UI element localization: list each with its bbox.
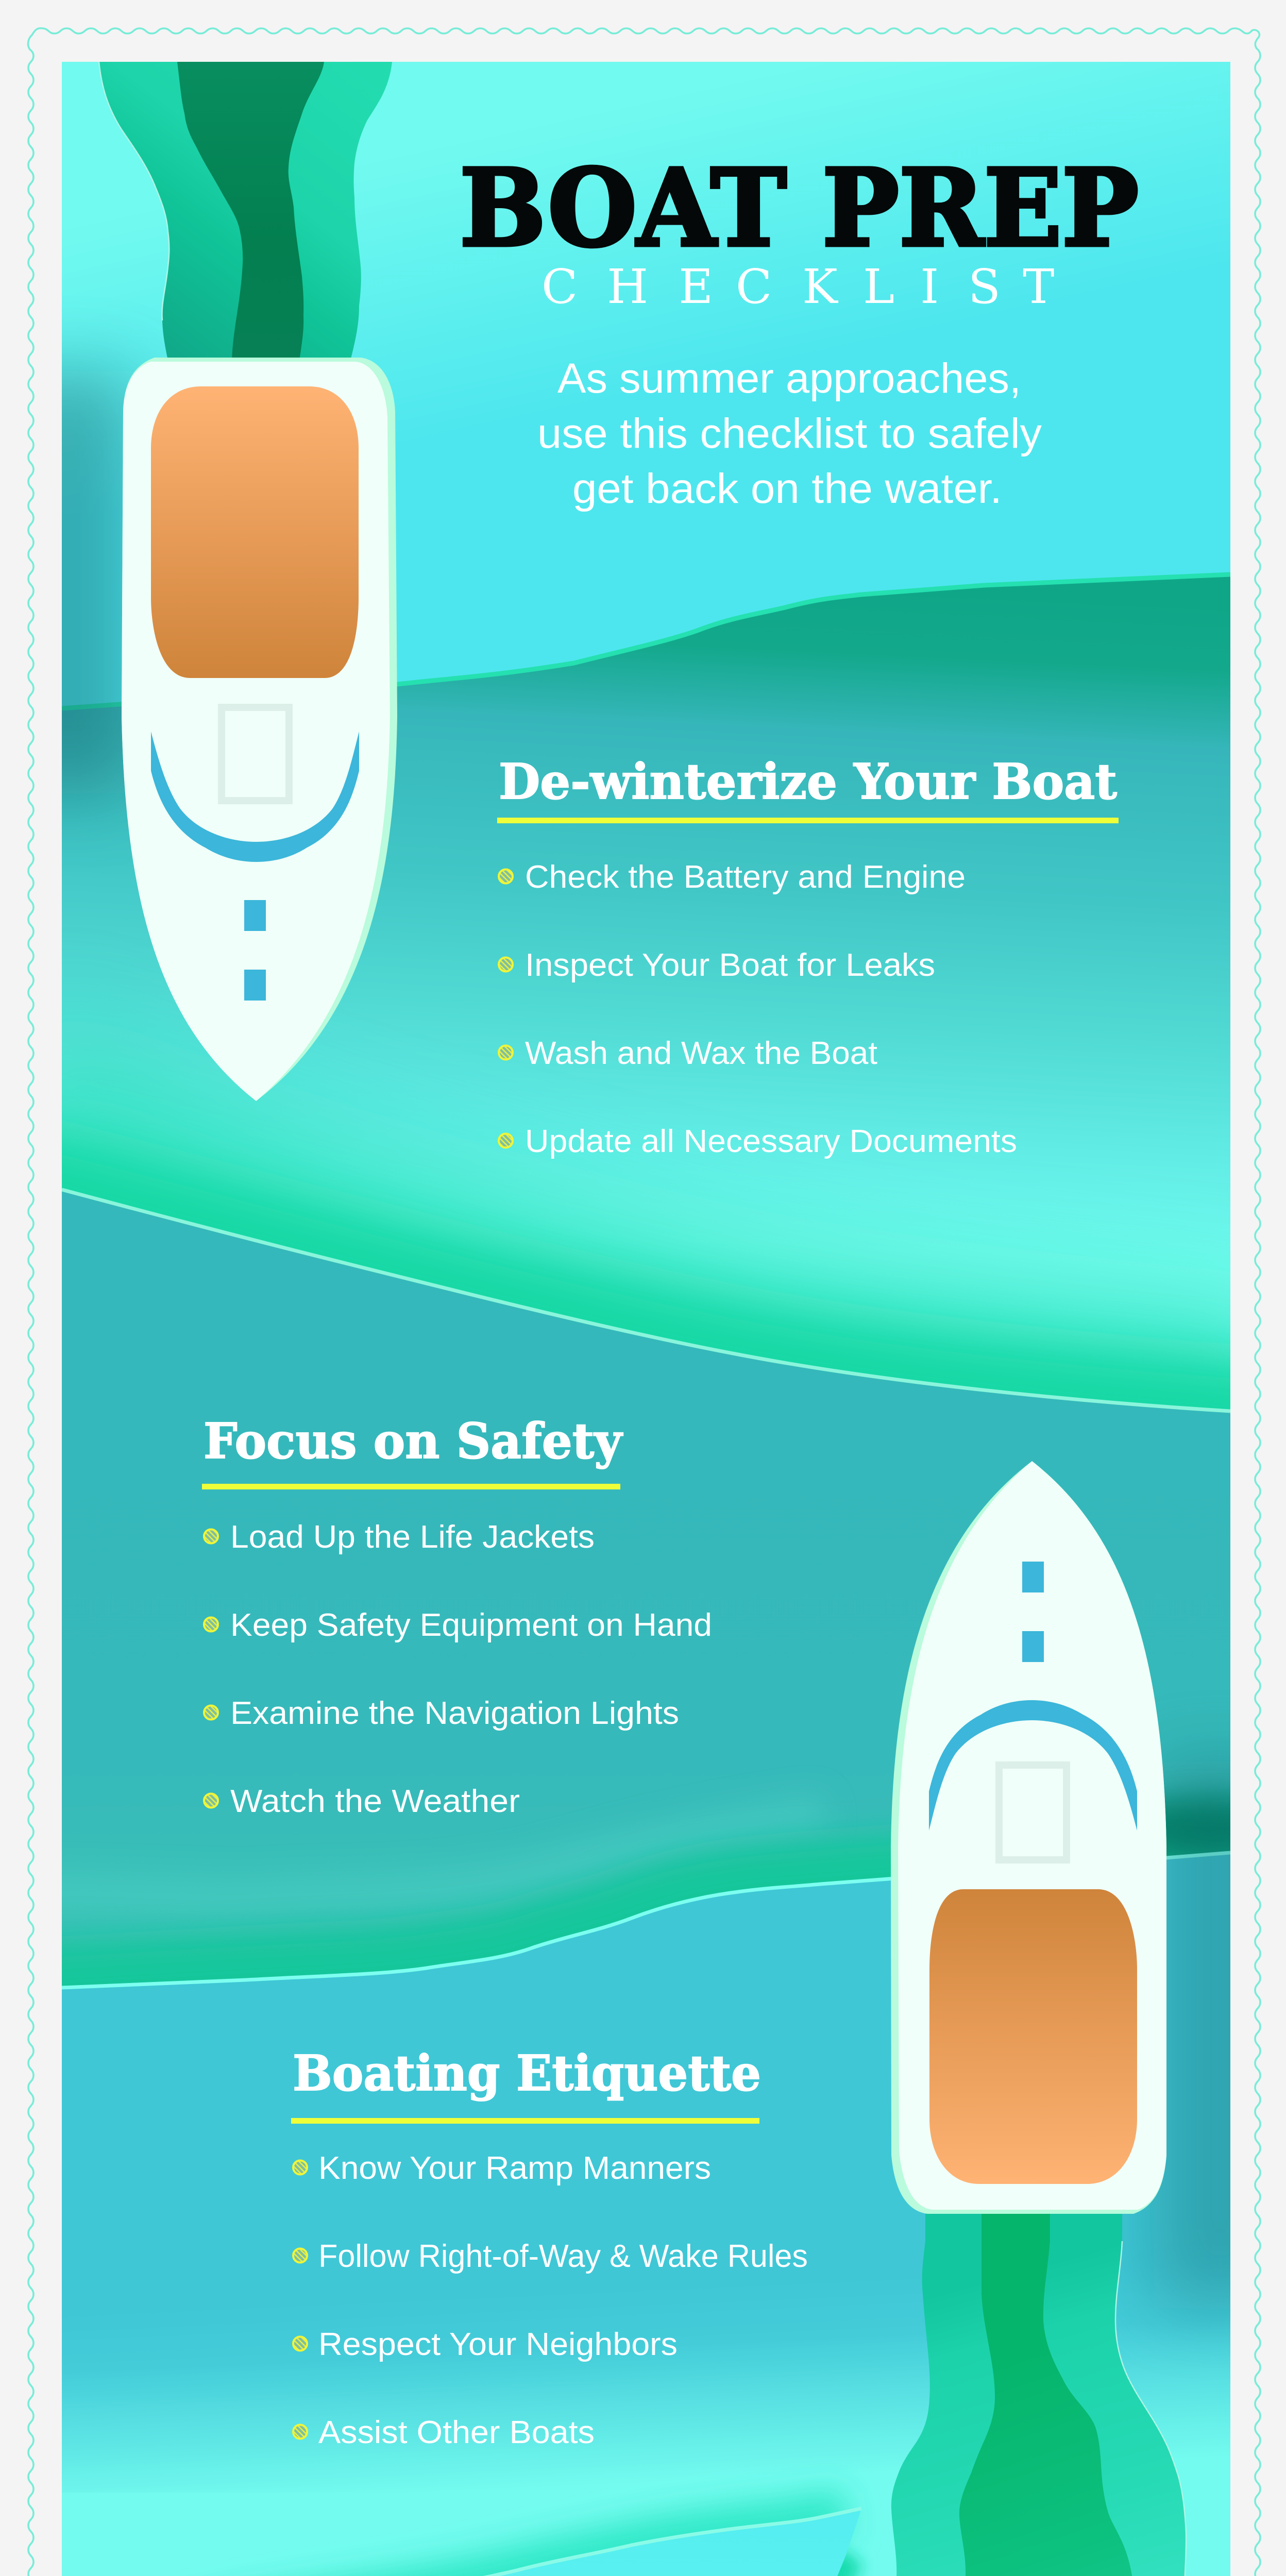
item: Examine the Navigation Lights <box>230 1696 679 1731</box>
windshield <box>929 1700 1137 1831</box>
bullet <box>204 1794 218 1807</box>
water layer: second teal wave <box>62 572 1230 1410</box>
section: Boating Etiquette <box>291 2045 808 2450</box>
intro text <box>537 355 1042 512</box>
deck hatch 1 <box>1022 1631 1044 1662</box>
bullet <box>293 2161 307 2174</box>
shadow: bottom boat <box>1154 1762 1286 2308</box>
bullet <box>499 870 513 883</box>
hull <box>122 358 397 1101</box>
subtitle: CHECKLIST <box>542 259 1054 314</box>
bullet <box>204 1618 218 1631</box>
cabin <box>151 386 359 678</box>
item: Follow Right-of-Way & Wake Rules <box>318 2239 808 2274</box>
hull deck <box>898 1461 1166 2210</box>
cabin <box>929 1889 1137 2184</box>
item: Update all Necessary Documents <box>525 1124 1017 1159</box>
boat: top <box>122 358 397 1101</box>
underline <box>497 818 1119 823</box>
hull deck <box>122 362 390 1101</box>
water layer: fourth blue wave <box>0 1853 1230 2576</box>
boat: bottom <box>891 1461 1166 2214</box>
bullet <box>293 2425 307 2439</box>
item: Assist Other Boats <box>318 2415 595 2450</box>
bullet <box>499 957 513 972</box>
item: Wash and Wax the Boat <box>525 1036 877 1071</box>
water layer: third teal wave <box>62 1188 1230 1986</box>
item: Know Your Ramp Manners <box>318 2150 711 2186</box>
water layer: top light blue <box>62 62 1230 706</box>
heading: Boating Etiquette <box>293 2045 761 2102</box>
bullet <box>293 2337 307 2350</box>
underline <box>291 2118 759 2124</box>
shadow: top boat <box>0 371 134 793</box>
hull <box>891 1461 1166 2214</box>
window frame <box>222 707 289 801</box>
item: Check the Battery and Engine <box>525 859 966 895</box>
wake: top boat <box>99 62 392 361</box>
wake: bottom boat <box>773 2205 1230 2576</box>
item: Watch the Weather <box>230 1784 520 1819</box>
windshield <box>151 732 359 862</box>
item: Keep Safety Equipment on Hand <box>230 1607 712 1643</box>
item: Inspect Your Boat for Leaks <box>525 947 935 983</box>
bullet <box>204 1529 218 1544</box>
section: Focus on Safety <box>202 1413 712 1819</box>
heading: Focus on Safety <box>204 1413 623 1470</box>
title: BOAT PREP <box>460 146 1139 270</box>
section: De-winterize Your Boat <box>497 753 1119 1159</box>
window frame <box>999 1765 1067 1860</box>
deck hatch 2 <box>244 970 266 1001</box>
deck hatch 2 <box>1022 1562 1044 1592</box>
bullet <box>293 2248 307 2263</box>
item: Load Up the Life Jackets <box>230 1519 595 1555</box>
item: Respect Your Neighbors <box>318 2327 678 2362</box>
bullet <box>499 1046 513 1059</box>
bullet <box>204 1705 218 1720</box>
intro text: As summer approaches, <box>557 355 1021 402</box>
intro text: use this checklist to safely <box>537 410 1042 457</box>
intro text: get back on the water. <box>572 465 1002 512</box>
water layer: fifth light wave <box>62 2509 861 2576</box>
heading: De-winterize Your Boat <box>499 753 1117 810</box>
bullet <box>499 1133 513 1148</box>
underline <box>202 1484 620 1489</box>
deck hatch 1 <box>244 900 266 931</box>
